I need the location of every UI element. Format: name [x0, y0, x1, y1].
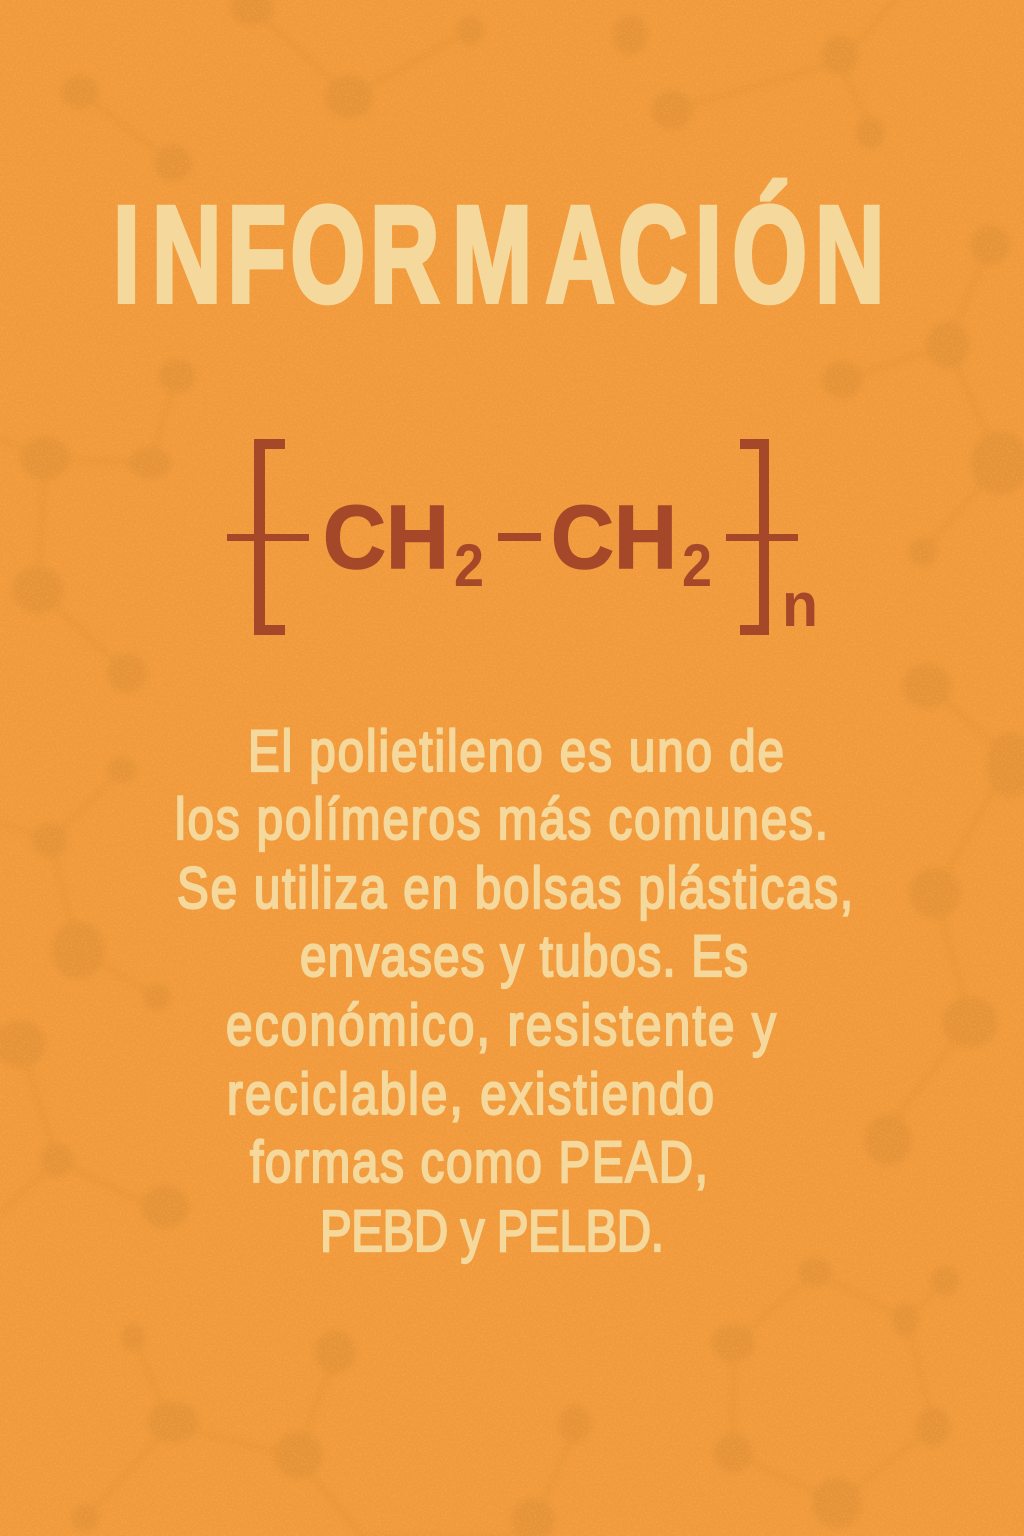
body paragraph — [175, 720, 853, 1264]
right bracket — [740, 439, 769, 635]
first CH2 group: CH — [323, 488, 449, 588]
title: INFORMACIÓN — [113, 179, 884, 332]
second CH2 group: CH — [551, 488, 677, 588]
right bond — [726, 534, 798, 541]
body paragraph: PEBD y PELBD. — [320, 1200, 664, 1264]
central bond — [498, 533, 541, 541]
molecule: left upper — [0, 359, 196, 693]
molecule: left middle — [0, 757, 171, 1011]
chemical formula: polyethylene repeat unit — [227, 439, 818, 640]
body paragraph: los polímeros más comunes. — [175, 788, 828, 852]
body paragraph: Se utiliza en bolsas plásticas, — [177, 857, 853, 921]
molecule: bottom right ring — [711, 1257, 960, 1529]
left bracket — [254, 439, 285, 635]
molecule: right lower — [864, 663, 1024, 1166]
subscript n: n — [782, 571, 818, 640]
molecule: top right — [612, 0, 895, 149]
body paragraph: formas como PEAD, — [250, 1131, 708, 1195]
molecule: top left — [61, 0, 484, 182]
left bond — [227, 534, 309, 541]
body paragraph: reciclable, existiendo — [227, 1063, 714, 1127]
molecule: right upper — [821, 225, 1024, 567]
body paragraph: El polietileno es uno de — [248, 720, 784, 784]
second CH2 group: 2 — [682, 532, 712, 599]
body paragraph: económico, resistente y — [226, 994, 776, 1058]
molecule: bottom centre — [363, 1405, 592, 1536]
molecule: left lower — [0, 1020, 189, 1229]
first CH2 group: 2 — [454, 532, 484, 599]
molecule: bottom left — [71, 1323, 363, 1536]
body paragraph: envases y tubos. Es — [300, 925, 748, 989]
